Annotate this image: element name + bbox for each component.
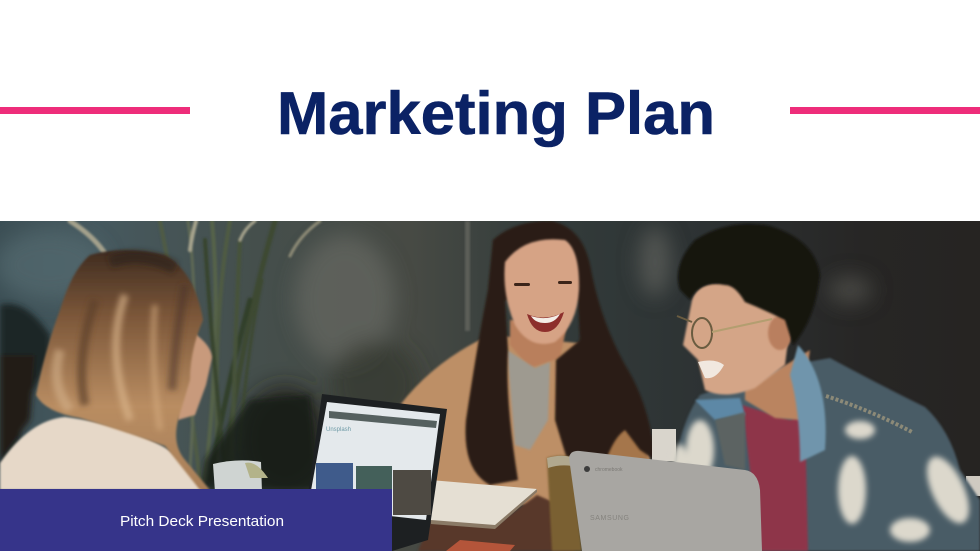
sweater xyxy=(0,417,202,490)
table xyxy=(418,495,575,551)
denim collar xyxy=(790,345,826,462)
hair strands xyxy=(57,257,185,430)
title: Marketing Plan xyxy=(277,80,715,147)
face xyxy=(504,239,579,344)
person: woman centre xyxy=(400,221,655,505)
ear xyxy=(768,316,792,350)
hair xyxy=(678,224,820,345)
glasses xyxy=(677,316,772,348)
red shirt xyxy=(742,405,808,551)
screen heading: Unsplash xyxy=(326,427,351,433)
jacket seam xyxy=(826,396,912,432)
neck xyxy=(510,320,568,368)
cardigan xyxy=(400,335,650,505)
silver laptop: SAMSUNG xyxy=(590,515,630,522)
red book on table xyxy=(446,540,515,551)
face xyxy=(683,282,790,395)
left accent line xyxy=(0,107,190,114)
grey top xyxy=(507,350,550,450)
thumbnails row xyxy=(329,411,437,428)
laptop screen images xyxy=(316,463,353,493)
left laptop xyxy=(300,394,447,551)
white bench right xyxy=(966,476,980,496)
glass of beer xyxy=(547,456,582,551)
eyes xyxy=(514,281,572,286)
neck xyxy=(745,350,810,420)
silver laptop xyxy=(569,451,762,551)
photo: three women laughing around laptops xyxy=(0,221,980,551)
wall xyxy=(0,221,980,551)
right accent line xyxy=(790,107,980,114)
hair xyxy=(466,221,655,485)
bleach patches xyxy=(672,420,978,542)
smile xyxy=(698,361,724,378)
hair xyxy=(36,250,210,490)
white bench xyxy=(652,429,676,461)
smile xyxy=(527,312,564,332)
plant pot shadow xyxy=(200,395,320,490)
person: right woman xyxy=(668,224,980,551)
notebook xyxy=(430,480,537,529)
denim jacket xyxy=(668,358,980,551)
glass of water with lime xyxy=(213,460,268,492)
person: woman from behind (left) xyxy=(0,250,212,490)
jacket lapel xyxy=(715,412,745,470)
face xyxy=(178,334,214,421)
dark shapes at left edge xyxy=(0,304,50,470)
banner caption: Pitch Deck Presentation xyxy=(120,513,284,530)
plant xyxy=(70,221,320,480)
silver laptop: chromebook xyxy=(595,467,623,473)
banner xyxy=(0,489,392,551)
